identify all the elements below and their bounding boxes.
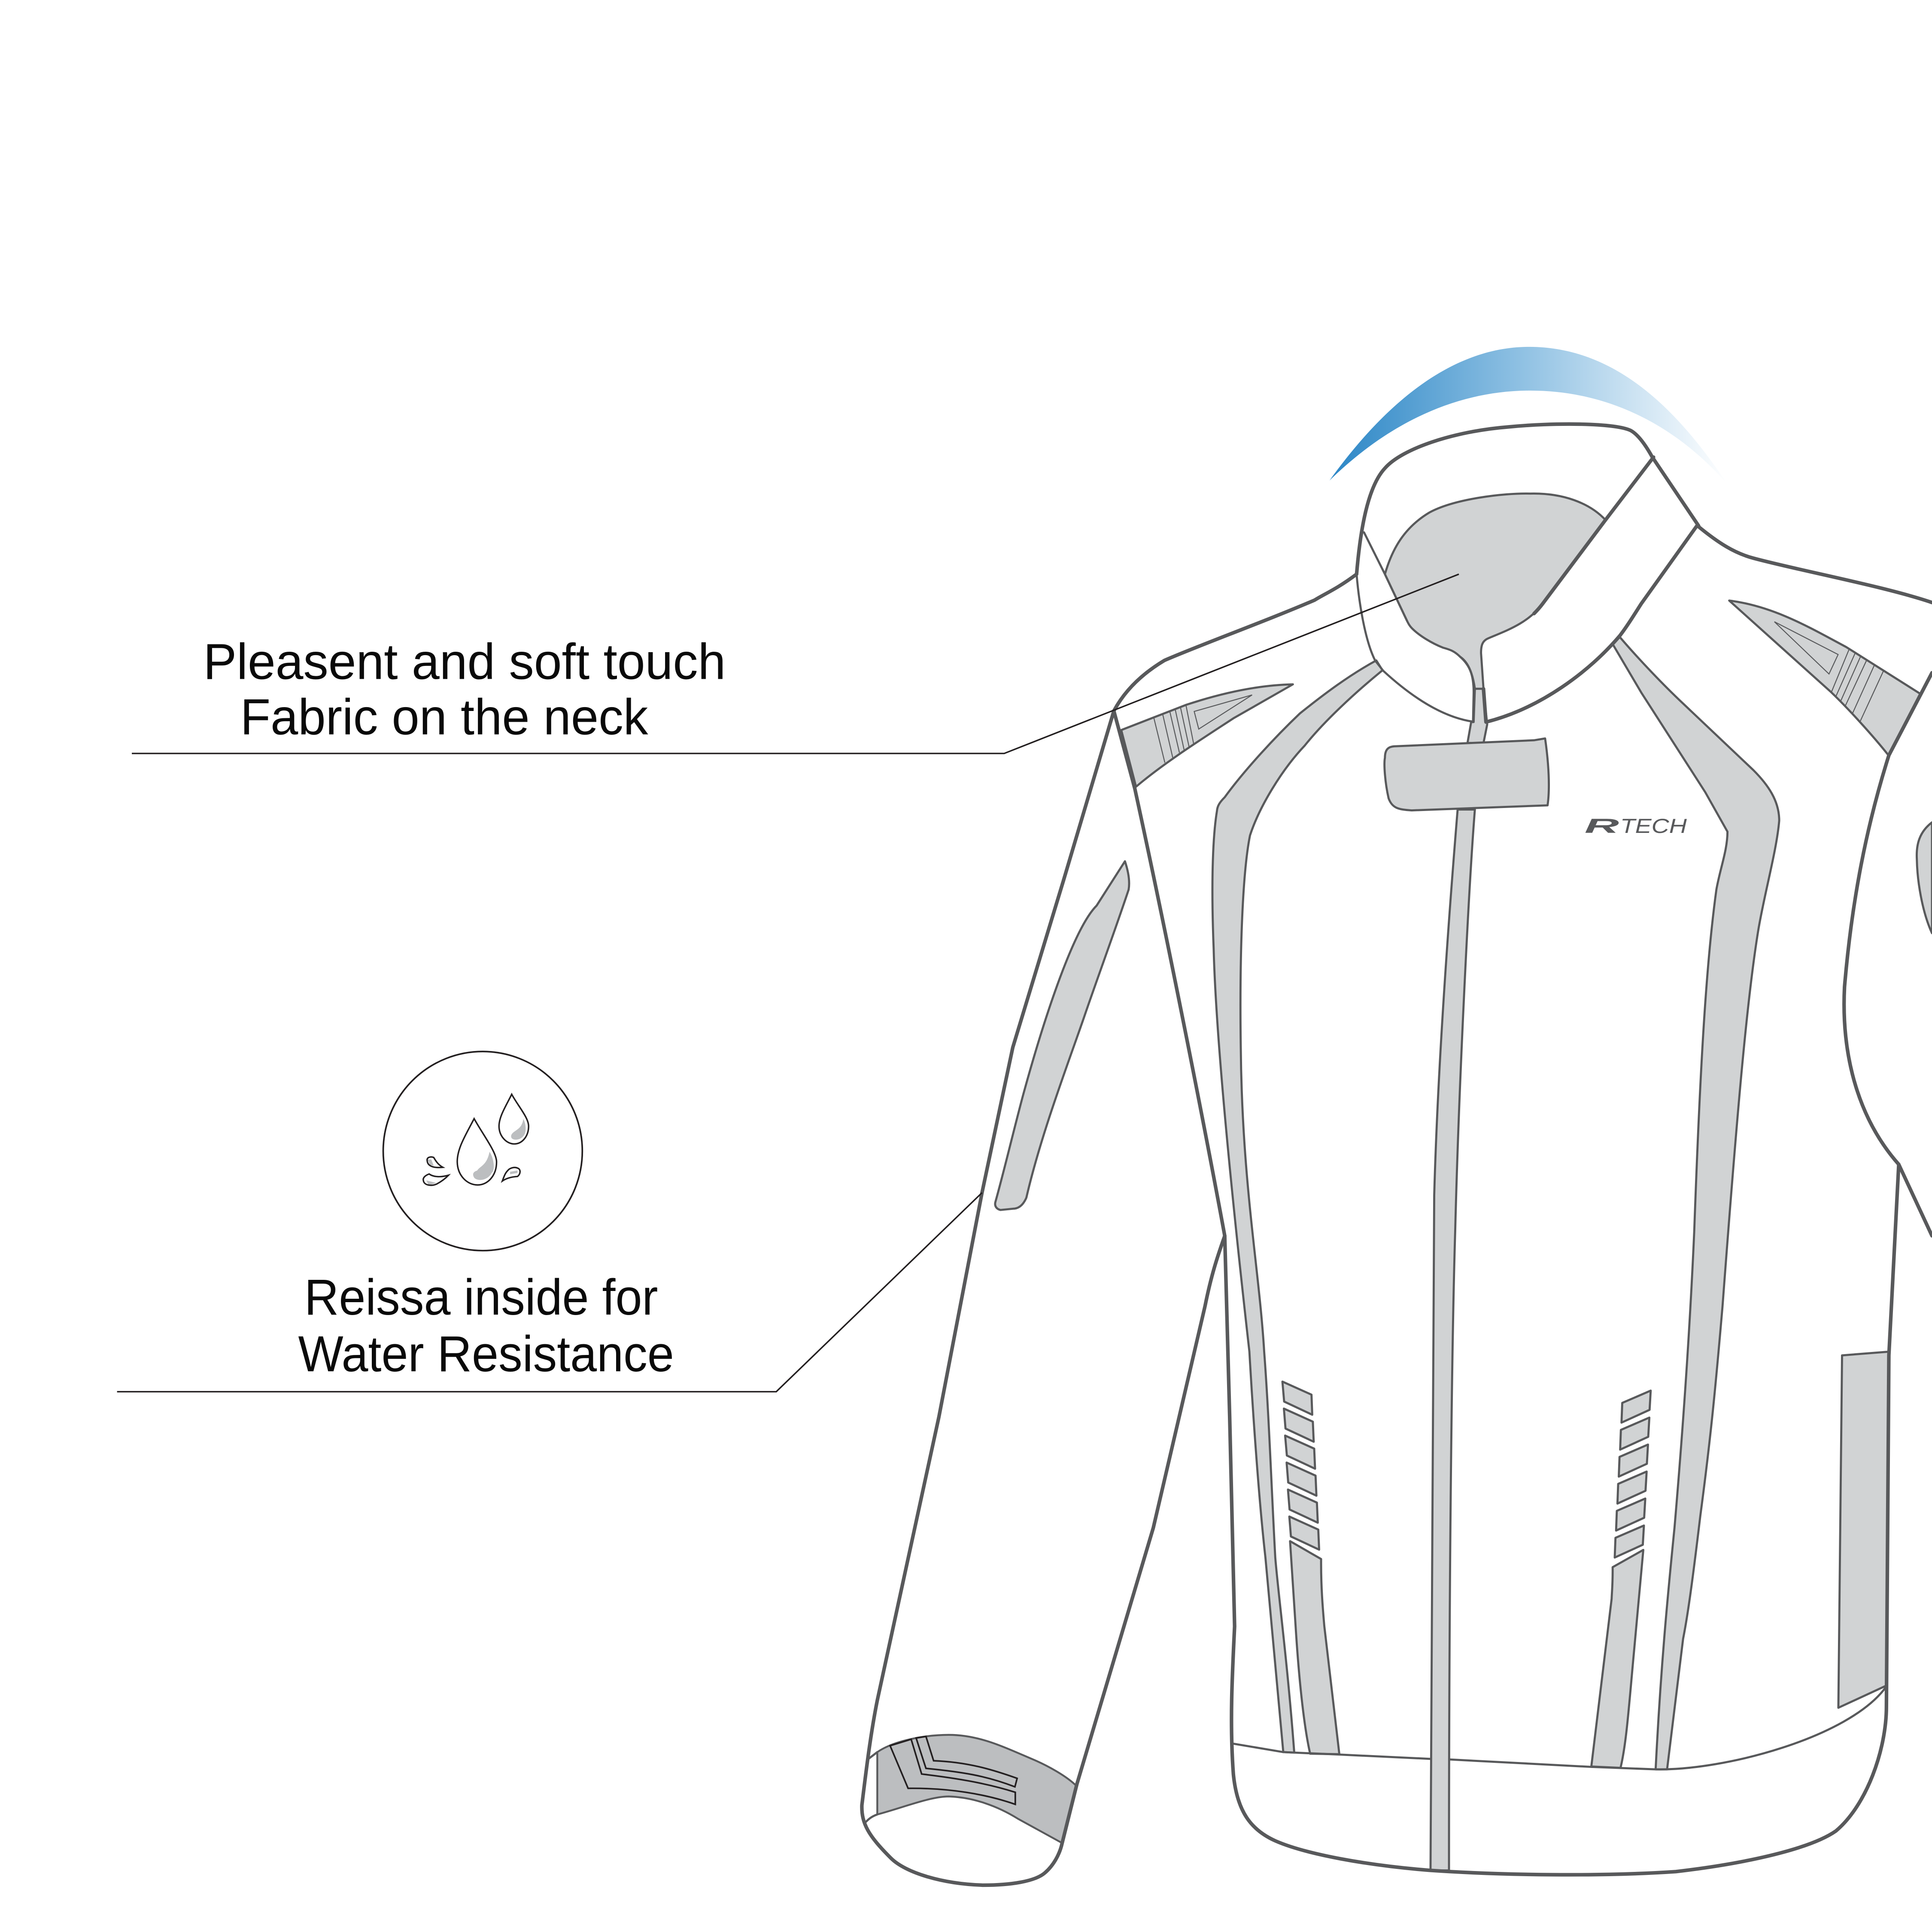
text: neck fabric: Fabric on the neck bbox=[240, 688, 648, 745]
callout: neck fabric bbox=[132, 574, 1459, 753]
outline: left sleeve bbox=[862, 711, 1225, 1885]
panel: center zipper bbox=[1431, 810, 1475, 1871]
outlines: collar and shoulders bbox=[1114, 424, 1932, 722]
vents: right bbox=[1591, 1391, 1651, 1768]
logo: R-Tech: TECH bbox=[1620, 815, 1687, 838]
panel: left front stripe bbox=[1212, 660, 1382, 1753]
panel: right shoulder bbox=[1729, 601, 1920, 755]
panel: right sleeve patch bbox=[1917, 822, 1932, 933]
vents: left bbox=[1282, 1382, 1340, 1754]
panel: neck lining bbox=[1385, 494, 1605, 689]
icon: water drops bbox=[383, 1051, 582, 1251]
panel: right front stripe bbox=[1613, 637, 1779, 1769]
panel: cuff band bbox=[864, 1735, 1076, 1843]
panel: right side pocket bbox=[1838, 1352, 1889, 1708]
panel: left sleeve stripe bbox=[995, 861, 1129, 1210]
logo: R-Tech: R bbox=[1585, 815, 1619, 838]
leader line: neck bbox=[132, 574, 1459, 753]
panel: left shoulder bbox=[1121, 684, 1293, 787]
leader line: water resistance bbox=[117, 1193, 982, 1392]
text: water resistance: Reissa inside for bbox=[304, 1269, 658, 1325]
text: water resistance: Water Resistance bbox=[298, 1325, 674, 1382]
panel: upper zipper bbox=[1467, 689, 1487, 743]
text: neck fabric: Pleasent and soft touch bbox=[204, 633, 726, 690]
callout: water resistance bbox=[117, 1051, 982, 1392]
panel: chin tab bbox=[1385, 738, 1549, 811]
jacket illustration bbox=[862, 424, 1932, 1885]
blue airflow arc bbox=[1330, 347, 1728, 484]
outlines: body bbox=[1114, 673, 1932, 1875]
